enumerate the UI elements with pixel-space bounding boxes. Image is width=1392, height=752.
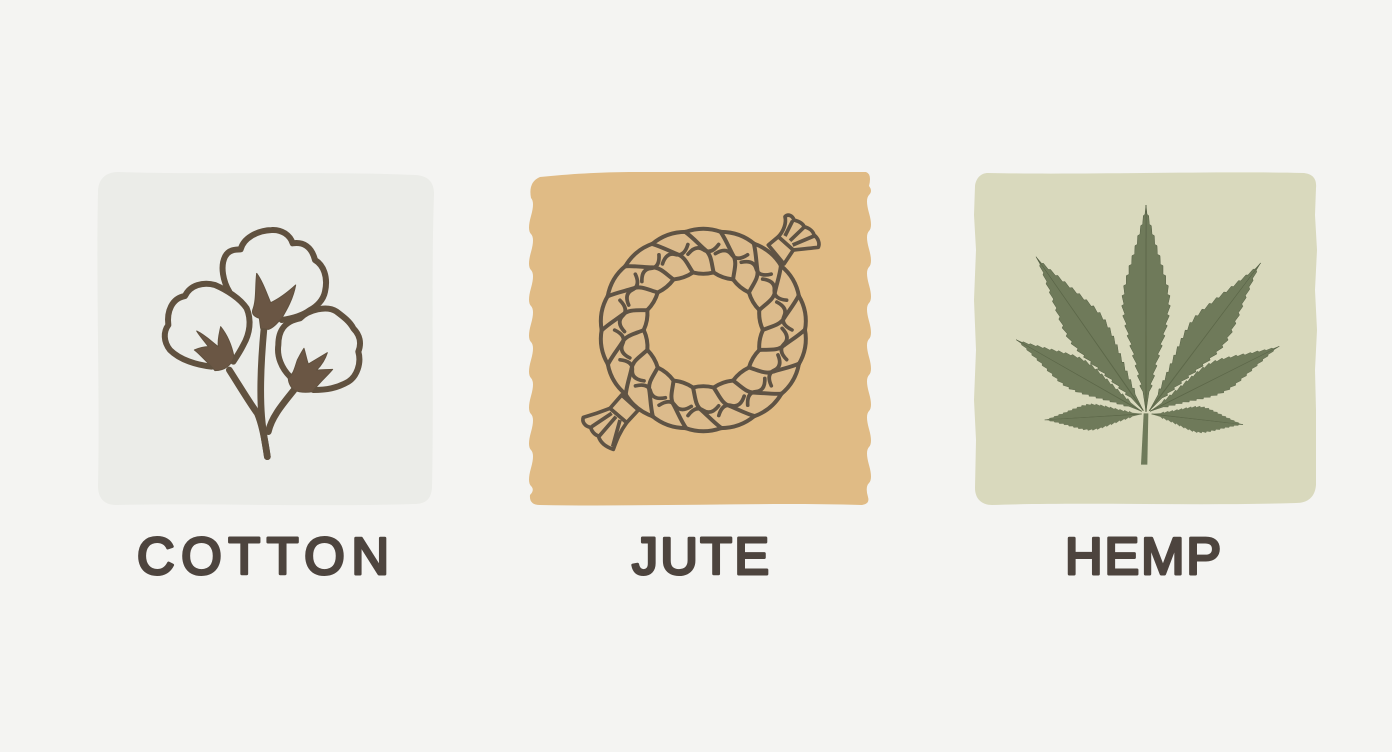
label: hemp: HEMP: [1065, 528, 1221, 586]
label: cotton: COTTON: [137, 528, 389, 586]
upper left leaflet: [1019, 245, 1160, 423]
lower left leaflet: [1008, 325, 1150, 426]
panel background: jute: [529, 172, 871, 505]
panel: hemp: [974, 172, 1317, 505]
bottom right leaflet: [1150, 401, 1245, 438]
lower right leaflet: [1143, 332, 1287, 426]
icon: rope ring: [583, 215, 819, 449]
stems: [229, 328, 294, 457]
calyxes: [194, 273, 333, 392]
icon: cotton plant: [165, 230, 360, 457]
tassel: bottom left: [583, 395, 638, 449]
right boll outline: [278, 309, 360, 390]
icon: hemp leaf: [1008, 205, 1287, 465]
panel: jute: [529, 172, 871, 505]
left boll outline: [165, 284, 250, 367]
tassel: top right: [768, 215, 819, 264]
label: jute: JUTE: [632, 528, 769, 586]
panel background: hemp: [974, 172, 1317, 505]
bottom left leaflet: [1044, 401, 1142, 433]
center leaflet: [1122, 205, 1170, 412]
upper right leaflet: [1133, 250, 1277, 423]
top boll outline: [223, 230, 326, 320]
panel background: cotton: [97, 172, 434, 505]
panel: cotton: [97, 172, 434, 505]
stem: [1141, 413, 1148, 465]
rope strands: [598, 229, 808, 431]
